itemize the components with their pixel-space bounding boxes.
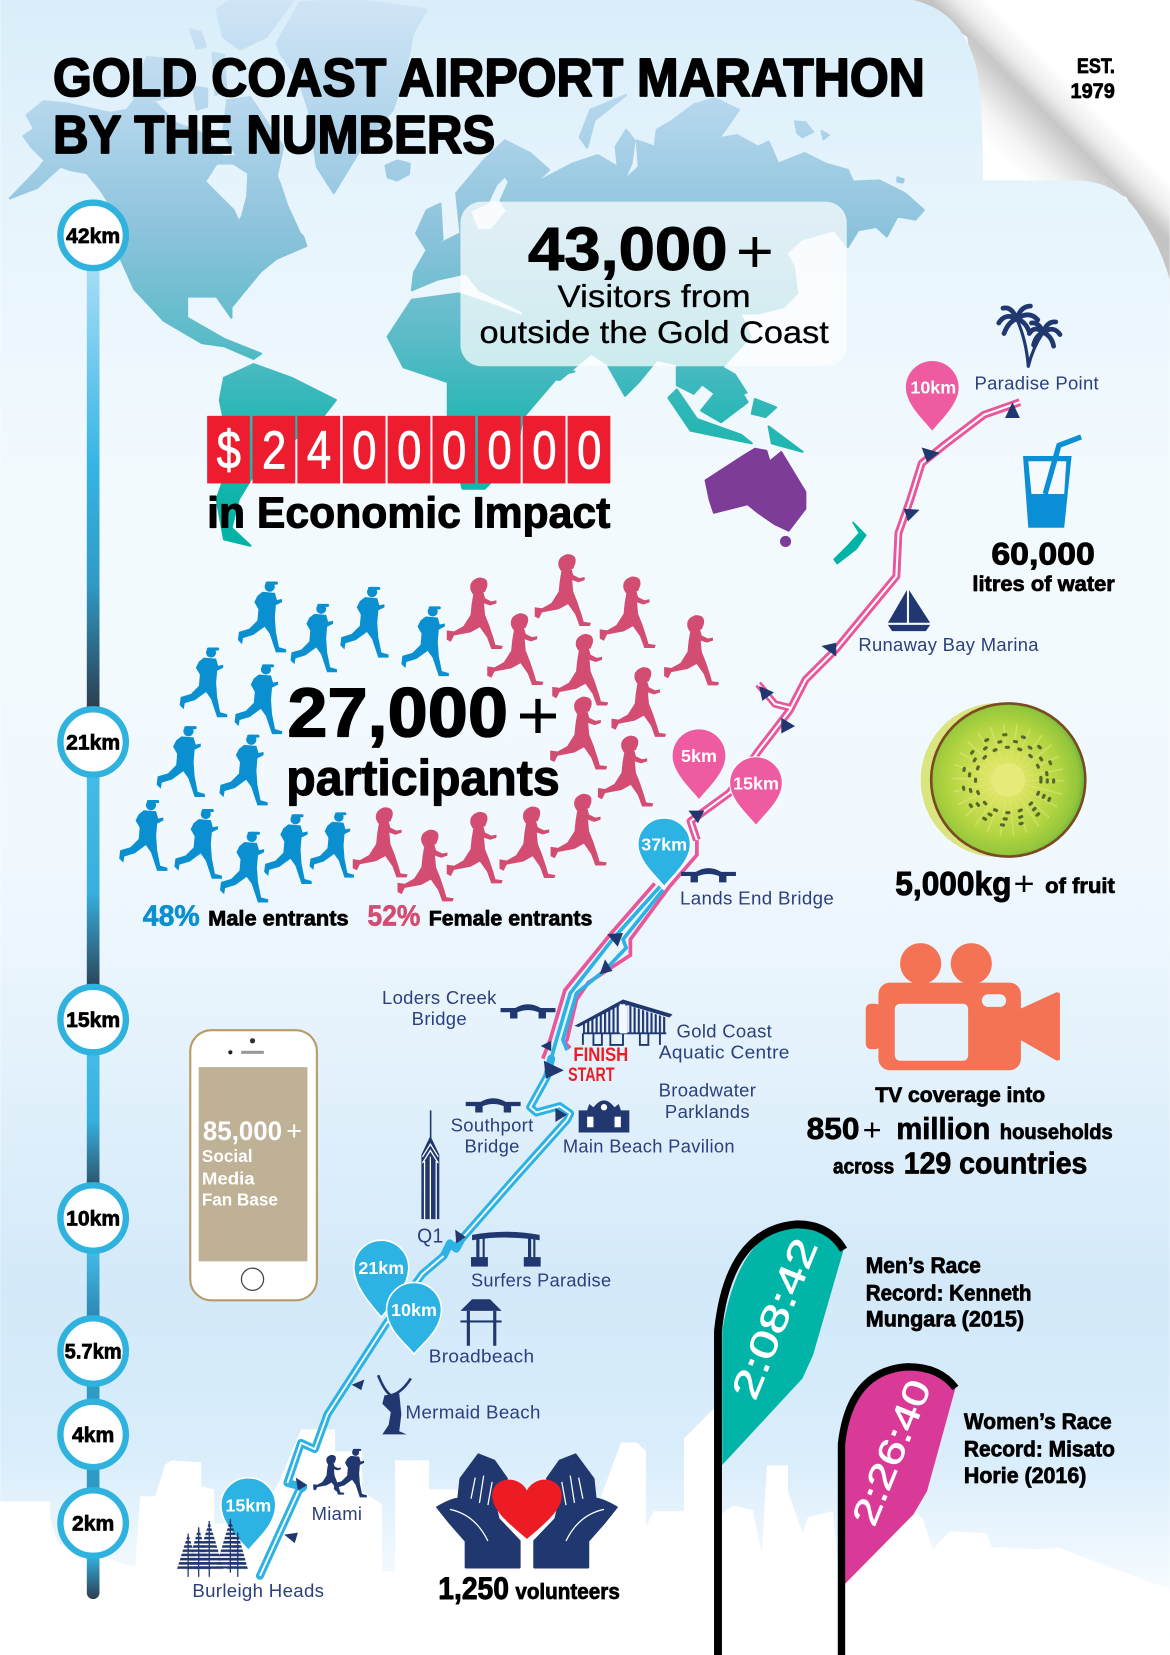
icon: southport bridge: [466, 1098, 521, 1112]
male runners: [119, 582, 449, 902]
phone: 85,000: [203, 1116, 282, 1146]
label: Mermaid Beach: Mermaid Beach: [406, 1402, 541, 1423]
pin: 15km pink: [730, 757, 782, 825]
label: Gold Coast Aquatic Centre: Aquatic Centre: [659, 1042, 790, 1063]
economic impact counter: 4: [307, 421, 331, 481]
pin: 15km pink: 15km: [733, 774, 779, 794]
women's record text: Women’s Race: [964, 1409, 1112, 1434]
volunteers stat: [438, 1570, 620, 1606]
label: Southport Bridge: [451, 1114, 534, 1157]
title: GOLD COAST AIRPORT MARATHON: [53, 48, 925, 108]
fruit stat: of fruit: [1045, 875, 1115, 898]
southeast asia islands: [668, 367, 802, 452]
pin: 5km: 5km: [681, 746, 717, 766]
gender split: Male entrants: [208, 908, 349, 931]
fruit stat: +: [1014, 865, 1035, 903]
participants headline: 27,000: [287, 674, 508, 752]
fruit stat: [895, 865, 1115, 903]
distance timeline: 10km: [66, 1207, 120, 1230]
fruit stat: 5,000kg: [895, 865, 1011, 903]
phone: [190, 1030, 317, 1300]
gender split: 48%: [143, 901, 200, 933]
men's record text: Men’s Race: [866, 1253, 981, 1278]
flag: men's record: 2:08:42: [724, 1233, 827, 1405]
icon: miami runners: [313, 1449, 367, 1497]
economic impact counter: 0: [577, 421, 601, 481]
finish and start: [568, 1045, 628, 1086]
pin: 10km south: 10km: [391, 1300, 437, 1320]
water stat: litres of water: [972, 573, 1115, 596]
label: Burleigh Heads: Burleigh Heads: [192, 1580, 324, 1601]
page curl: [913, 0, 1170, 280]
icon: loders creek bridge: [501, 1004, 555, 1019]
pin: 37km: 37km: [641, 835, 687, 855]
distance timeline: [60, 203, 126, 1599]
volunteers stat: 1,250: [438, 1570, 509, 1606]
label: Broadbeach: Broadbeach: [429, 1346, 534, 1367]
distance timeline: 5.7km: [65, 1340, 122, 1363]
distance timeline: 4km: [72, 1424, 114, 1447]
established date: 1979: [1071, 80, 1115, 103]
tv coverage stat: 850: [807, 1112, 859, 1146]
map: new zealand: [834, 522, 866, 564]
distance timeline: 21km: [66, 731, 120, 754]
women's record text: [964, 1409, 1115, 1488]
icon: norfolk pines: [177, 1519, 248, 1577]
distance timeline: 15km: [66, 1009, 120, 1032]
icon: mermaid statue: [378, 1375, 411, 1434]
economic impact counter: 0: [532, 421, 557, 481]
phone: Social: [202, 1146, 253, 1166]
established date: EST.: [1077, 55, 1115, 78]
economic impact counter: 2: [262, 421, 286, 481]
britain and ireland: [416, 204, 443, 250]
icon: sailboat: [888, 590, 930, 631]
location pins: [221, 361, 959, 1551]
course route: south blue: [260, 887, 660, 1576]
label: Loders Creek Bridge: Bridge: [412, 1008, 467, 1029]
label: Gold Coast Aquatic Centre: Gold Coast: [677, 1021, 772, 1042]
course route: return band: [543, 840, 697, 1059]
gender split: [143, 901, 592, 933]
icon: surfers paradise arch: [471, 1232, 541, 1267]
label: Southport Bridge: Southport: [451, 1114, 534, 1135]
tv coverage stat: million: [896, 1112, 990, 1146]
icon: main beach pavilion: [579, 1100, 629, 1133]
icon: aquatic centre: [574, 1000, 673, 1045]
icon: glass of water: [1023, 437, 1081, 528]
iceland: [386, 160, 410, 180]
map: australia: [705, 449, 806, 546]
eurasia: [412, 98, 924, 400]
pin: 10km north: 10km: [910, 378, 956, 398]
pin: 10km north: [906, 361, 959, 431]
visitors callout: outside the Gold Coast: [479, 314, 829, 350]
tv coverage stat: households: [1000, 1121, 1113, 1144]
label: Paradise Point: Paradise Point: [974, 372, 1099, 393]
visitors callout: 43,000: [528, 215, 727, 283]
economic impact counter: in Economic Impact: [207, 490, 610, 538]
economic impact counter: 0: [397, 421, 421, 481]
south america: [217, 364, 336, 546]
economic impact counter: [207, 416, 610, 538]
label: Broadwater Parklands: Broadwater: [659, 1080, 756, 1101]
finish and start: FINISH: [573, 1045, 628, 1066]
distance timeline: 42km: [66, 225, 120, 248]
visitors callout: [460, 202, 847, 366]
participants headline: [286, 674, 560, 806]
men's record text: Record: Kenneth: [866, 1280, 1031, 1305]
label: Miami: Miami: [312, 1503, 362, 1524]
icon: video camera: [866, 943, 1060, 1070]
arctic islands: [133, 0, 294, 176]
greenland: [277, 0, 427, 193]
label: Broadwater Parklands: [659, 1080, 756, 1122]
men's record text: Mungara (2015): [866, 1307, 1024, 1332]
women's record text: Horie (2016): [964, 1463, 1086, 1488]
tv coverage stat: TV coverage into: [875, 1084, 1045, 1107]
phone: +: [286, 1116, 302, 1146]
water stat: 60,000: [991, 536, 1095, 572]
tv coverage stat: [807, 1084, 1113, 1181]
flag: women's record: 2:26:40: [844, 1374, 939, 1531]
water stat: [972, 536, 1115, 596]
label: Loders Creek Bridge: Loders Creek: [382, 987, 497, 1008]
gender split: 52%: [368, 901, 420, 933]
label: Q1: Q1: [417, 1225, 444, 1247]
pin: 5km: [673, 729, 725, 799]
tv coverage stat: +: [863, 1113, 882, 1147]
phone: Media: [202, 1168, 256, 1188]
title: BY THE NUMBERS: [53, 105, 495, 165]
world map: [10, 0, 924, 546]
label: Runaway Bay Marina: Runaway Bay Marina: [858, 634, 1039, 655]
novaya zemlya and arctic russia islands: [580, 95, 904, 183]
economic impact counter: $: [217, 421, 241, 481]
participants headline: participants: [286, 750, 560, 806]
women's record text: Record: Misato: [964, 1437, 1115, 1462]
tv coverage stat: across: [833, 1156, 894, 1179]
pin: 37km: [638, 818, 691, 887]
pin: 15km south: 15km: [225, 1495, 271, 1515]
finish and start: START: [568, 1065, 615, 1086]
title: [53, 48, 925, 165]
visitors callout: Visitors from: [558, 278, 751, 314]
volunteers stat: volunteers: [515, 1579, 620, 1604]
men's record text: [866, 1253, 1031, 1332]
africa: [388, 293, 574, 489]
economic impact counter: 0: [352, 421, 377, 481]
icon: kiwi fruit: [921, 703, 1085, 857]
flag: men's record: [718, 1224, 844, 1655]
icon: Q1 tower: [421, 1110, 439, 1219]
pin: 15km south: [221, 1478, 276, 1551]
female runners: [353, 554, 719, 901]
economic impact counter: 0: [487, 421, 512, 481]
visitors callout: +: [736, 217, 774, 285]
north america: [10, 97, 306, 359]
gender split: Female entrants: [429, 908, 592, 931]
icon: palm trees: [999, 306, 1060, 366]
established date: [1071, 55, 1115, 103]
label: Main Beach Pavilion: Main Beach Pavilion: [563, 1136, 735, 1157]
icon: broadbeach pagoda: [460, 1299, 502, 1346]
label: Gold Coast Aquatic Centre: [659, 1021, 790, 1063]
label: Broadwater Parklands: Parklands: [665, 1101, 750, 1122]
phone: Fan Base: [202, 1189, 278, 1209]
participants headline: +: [516, 676, 560, 754]
economic impact counter: 0: [442, 421, 466, 481]
course route: north pink: [260, 402, 1020, 1576]
flag: women's record: [841, 1367, 955, 1655]
distance timeline: 2km: [72, 1512, 114, 1535]
label: Southport Bridge: Bridge: [464, 1136, 520, 1157]
label: Loders Creek Bridge: [382, 987, 497, 1029]
label: Lands End Bridge: Lands End Bridge: [680, 888, 834, 909]
pin: 21km: 21km: [358, 1258, 404, 1278]
label: Surfers Paradise: Surfers Paradise: [471, 1270, 611, 1291]
pin: 10km south: [387, 1282, 441, 1354]
tv coverage stat: 129 countries: [904, 1147, 1087, 1181]
icon: lands end bridge: [681, 868, 736, 882]
pin: 21km: [354, 1240, 409, 1317]
skyline: [0, 1407, 1170, 1654]
icon: hands with heart: [437, 1454, 617, 1567]
route arrows: [284, 402, 1020, 1543]
